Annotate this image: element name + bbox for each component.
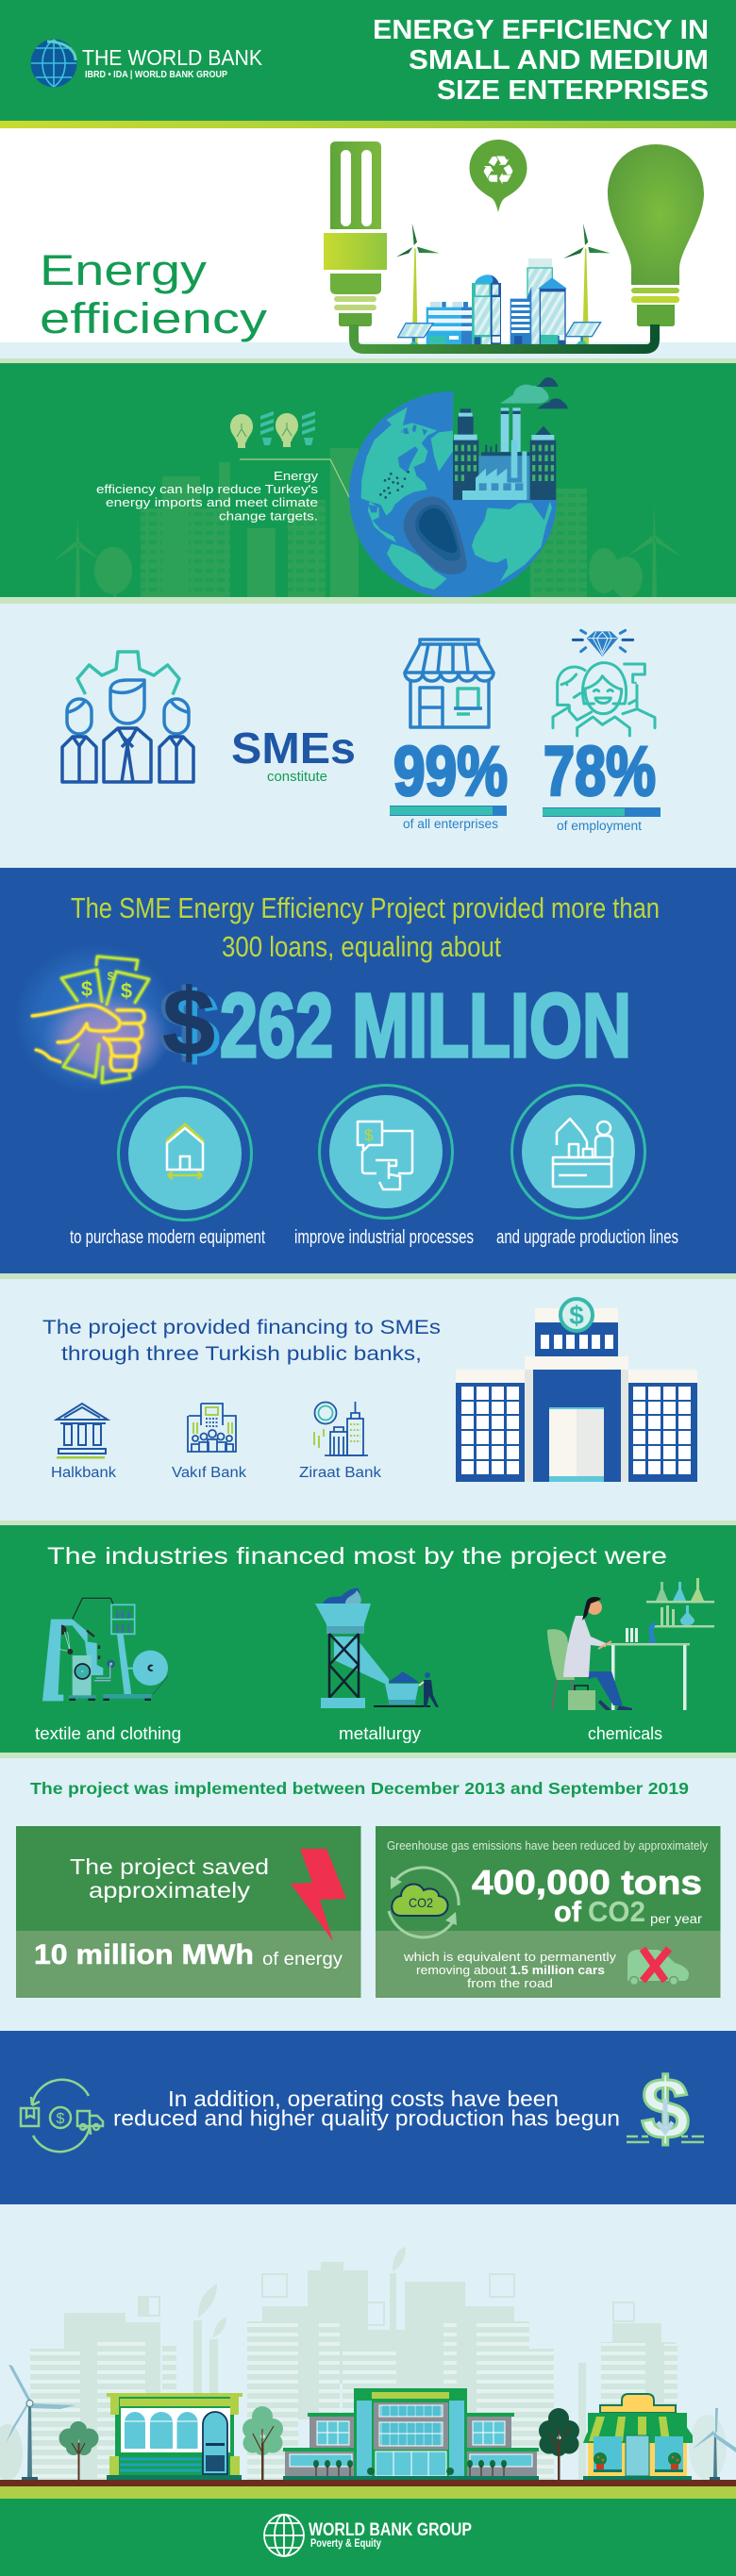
band (0, 1753, 736, 1758)
icon: connecting wire (354, 324, 655, 349)
captions (70, 1227, 678, 1248)
stat: 78% of employment (543, 732, 661, 833)
figure: 400,000 tons of CO2: 400,000 tons (472, 1863, 702, 1902)
icon: modern equipment (119, 1087, 251, 1221)
logo: The World Bank: IBRD • IDA | WORLD BANK GROUP (85, 69, 227, 80)
panel: SMEs statistics (0, 604, 736, 868)
text block: operating costs: reduced and higher quality production has begun (113, 2105, 620, 2130)
icon: industrial processes (319, 1085, 453, 1219)
icon: Vakıf Bank (172, 1404, 246, 1481)
icon: chemist in lab (547, 1578, 714, 1710)
text: equivalent cars: from the road (467, 1976, 553, 1990)
icon: metallurgy hopper (315, 1588, 439, 1708)
panel: city street (0, 2204, 736, 2481)
panel: operating costs (0, 2031, 736, 2204)
icon: right turbine (692, 2408, 736, 2480)
icon: left turbine (6, 2365, 75, 2480)
ground strip (0, 2480, 736, 2499)
icon: textile machine (42, 1598, 168, 1701)
logo: The World Bank: THE WORLD BANK (82, 45, 263, 70)
stat: 99% of all enterprises: of all enterprises (403, 817, 498, 831)
icon: bank building: $ (569, 1301, 584, 1330)
captions: and upgrade production lines (496, 1227, 678, 1248)
icon: Ziraat Bank (299, 1402, 381, 1481)
icon: dollar sign: $ (162, 970, 215, 1075)
title (373, 15, 709, 106)
icon: shop (405, 640, 493, 727)
panel: industries (0, 1525, 736, 1753)
figure: 10 million MWh: of energy (262, 1950, 343, 1969)
header band (0, 0, 736, 128)
icon: neon hand with money: $ (121, 979, 132, 1003)
panel: public banks (0, 1279, 736, 1521)
text block: operating costs: In addition, operating costs have been (168, 2086, 559, 2111)
text block: energy imports (96, 469, 319, 523)
faint skyline (53, 448, 681, 598)
captions: industries (35, 1724, 662, 1743)
panel: emissions reduced (376, 1826, 721, 1998)
stat: 78% of employment: 78% (544, 732, 656, 810)
panel: imports and climate targets (0, 363, 736, 598)
icon: city scene with turbines (396, 224, 611, 345)
icon: falling dollar: $ (641, 2061, 690, 2157)
icon: Ziraat Bank: Ziraat Bank (299, 1465, 381, 1481)
footer band (0, 2499, 736, 2576)
icon: production lines (511, 1085, 645, 1219)
band (0, 358, 736, 363)
icon: globe with factory (349, 377, 568, 598)
text: equivalent cars: which is equivalent to permanently (403, 1950, 617, 1964)
heading: SMEs: SMEs (231, 723, 356, 773)
icon: dollar sign: $ (158, 970, 210, 1075)
icon: row of bulbs (230, 411, 315, 448)
icon: industrial processes: $ (364, 1126, 374, 1144)
panel: energy efficiency hero (0, 128, 736, 358)
title: SMALL AND MEDIUM (409, 45, 709, 75)
icon: factory (453, 407, 556, 500)
text: greenhouse gas: Greenhouse gas emissions have been reduced by approximately (387, 1839, 709, 1853)
text block: energy imports: energy imports and meet climate (106, 495, 318, 509)
background skyline (0, 2247, 727, 2481)
icon: neon hand with money (14, 943, 175, 1094)
stat: 78% of employment: of employment (557, 819, 642, 833)
icon: team with diamond (553, 630, 655, 736)
heading: project loans: 300 loans, equaling about (222, 930, 501, 963)
text: project saved: The project saved (70, 1854, 269, 1879)
icon: three business people with gear (62, 652, 193, 782)
figure: 400,000 tons of CO2: of (554, 1895, 582, 1928)
logo: The World Bank (31, 40, 263, 87)
text block: financing (42, 1317, 441, 1365)
heading: Energy efficiency: efficiency (40, 294, 268, 342)
figure: 10 million MWh (34, 1939, 343, 1970)
figure: 10 million MWh: 10 million MWh (34, 1939, 254, 1970)
captions: to purchase modern equipment (70, 1227, 265, 1248)
heading: Energy efficiency (40, 246, 268, 342)
captions: improve industrial processes (294, 1227, 474, 1248)
label: constitute: constitute (267, 769, 327, 785)
stat: 99% of all enterprises (390, 732, 508, 831)
panel: energy saved (16, 1826, 360, 1998)
icon: recycle pin: ♻ (480, 147, 516, 193)
logo: World Bank Group: Poverty & Equity (310, 2536, 381, 2550)
text block: financing: The project provided financing to SMEs (42, 1317, 441, 1338)
title: ENERGY EFFICIENCY IN (373, 15, 709, 45)
icon: falling dollar (627, 2061, 704, 2157)
icon: CO2 cloud cycle (389, 1868, 459, 1937)
heading: project loans (71, 891, 660, 963)
icon: CO2 cloud cycle: CO2 (409, 1895, 433, 1910)
captions: industries: chemicals (588, 1724, 662, 1743)
text: equivalent cars (403, 1950, 617, 1990)
icon: clouds (500, 377, 568, 408)
text block: operating costs (113, 2086, 620, 2130)
text block: financing: through three Turkish public banks, (61, 1343, 422, 1365)
icon: dollar sign: $ (168, 972, 221, 1078)
text block: energy imports: Energy (274, 469, 319, 483)
text: equivalent cars: removing about 1.5 million cars (416, 1963, 605, 1977)
icon: left shop (107, 2393, 243, 2480)
icon: CFL bulb (324, 141, 387, 326)
heading: Energy efficiency: Energy (40, 246, 208, 294)
band (0, 1521, 736, 1525)
figure: 400,000 tons of CO2: per year (650, 1911, 702, 1926)
band (0, 1273, 736, 1279)
captions: industries: textile and clothing (35, 1724, 181, 1743)
icon: crossed-out car (627, 1949, 689, 1985)
icon: incandescent bulb (608, 144, 704, 326)
icon: neon hand with money: $ (81, 977, 92, 1001)
icon: Halkbank: Halkbank (51, 1465, 116, 1481)
logo: World Bank Group: WORLD BANK GROUP (309, 2520, 472, 2540)
text: project saved: approximately (89, 1878, 250, 1903)
icon: main building (283, 2388, 539, 2480)
captions: industries: metallurgy (339, 1724, 421, 1743)
icon: Halkbank (51, 1404, 116, 1481)
logo: World Bank Group (264, 2515, 472, 2556)
heading: industries: The industries financed most by the project were (47, 1543, 667, 1570)
icon: lightning bolt (291, 1849, 346, 1941)
figure: 400,000 tons of CO2 (472, 1863, 702, 1928)
band (0, 597, 736, 604)
title: SIZE ENTERPRISES (437, 75, 709, 106)
text block: energy imports: change targets. (219, 509, 318, 523)
icon: recycle pin (470, 140, 527, 212)
icon: trees (59, 2406, 579, 2480)
figure: 400,000 tons of CO2: CO2 (588, 1895, 645, 1928)
text: project saved (70, 1854, 269, 1903)
icon: logistics cycle (21, 2080, 103, 2152)
icon: right shop (583, 2394, 693, 2481)
icon: bank building (456, 1299, 697, 1482)
stat: 99% of all enterprises: 99% (393, 732, 508, 810)
heading: implementation dates: The project was implemented between December 2013 and September 2019 (30, 1779, 689, 1798)
icon: neon hand with money: $ (108, 970, 114, 983)
text block: energy imports: efficiency can help reduce Turkey's (96, 482, 319, 496)
callout line (240, 459, 349, 497)
label: dollar in cycle: $ (57, 2111, 65, 2127)
icon: Vakıf Bank: Vakıf Bank (172, 1465, 246, 1481)
panel: loans (0, 868, 736, 1273)
